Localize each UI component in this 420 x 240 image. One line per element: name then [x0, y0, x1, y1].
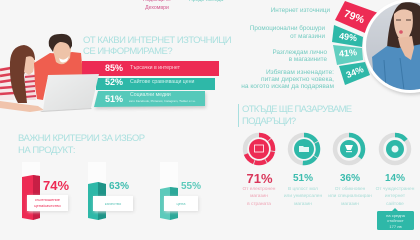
bar value 3: 51% — [105, 94, 123, 104]
heading: sources — [83, 35, 231, 57]
top fragment text — [143, 0, 171, 10]
wedge value 3: 41% — [339, 47, 357, 58]
heading: criteria — [18, 133, 145, 156]
heading: sources: СЕ ИНФОРМИРАМЕ? — [83, 46, 172, 57]
side label 2: Промоционални брошури — [250, 25, 325, 32]
donut text 1 — [242, 187, 276, 207]
accent: heading rule — [238, 104, 239, 127]
bar values: 85% — [105, 63, 123, 73]
donut text 4 — [376, 187, 414, 207]
donut 2 — [290, 135, 318, 163]
donut text 2 — [284, 187, 322, 207]
donut text 1: в страната — [247, 202, 271, 207]
side label 2: от магазини — [290, 33, 325, 40]
criteria card 1: цена/качество — [34, 203, 61, 208]
heading: criteria: НА ПРОДУКТ: — [18, 145, 75, 156]
cylinder 3 — [160, 162, 178, 220]
donut value 4: 14% — [385, 173, 405, 184]
side label 3 — [272, 48, 327, 63]
donut value 3: 36% — [340, 173, 360, 184]
criteria card 1: съотношение — [35, 197, 60, 202]
cylinder 2 — [88, 162, 106, 220]
wedge values: 79% — [342, 8, 366, 26]
donut text 3: или специализиран — [328, 194, 372, 199]
criteria card 2: качество — [105, 201, 121, 206]
donut text 1: От електронен — [243, 187, 275, 192]
wedge value 4: 34% — [345, 64, 365, 80]
bars: shopping sources — [82, 61, 219, 107]
bar value 2: 52% — [105, 77, 123, 87]
callout — [377, 211, 414, 230]
donut text 4: От чуждестранен — [376, 187, 414, 192]
laptop — [43, 74, 99, 111]
side label 4: питам директно човека, — [261, 76, 334, 83]
bar label 3: Социални медии — [130, 92, 171, 98]
criteria value 2: 63% — [109, 180, 129, 192]
criteria value 3: 55% — [181, 180, 201, 192]
criteria card 3 — [164, 196, 198, 211]
illustration: couple with laptop — [0, 34, 83, 112]
donut text 4: сайтове — [386, 202, 404, 207]
bar sublabel 3: като Facebook, Pinterest, Instagram, Twitter и т.н. — [129, 99, 196, 103]
top fragment text: Дехомври — [145, 4, 169, 10]
heading: where: ОТКЪДЕ ЩЕ ПАЗАРУВАМЕ — [242, 104, 351, 115]
donut value 2: 51% — [293, 173, 313, 184]
callout pointer — [392, 208, 398, 211]
bar label 2: Сайтове сравняващи цени — [130, 79, 194, 85]
donut text 2: магазин — [294, 202, 312, 207]
donut 1 — [245, 135, 273, 163]
criteria card 3: цена — [177, 201, 185, 206]
side label 3: Разглеждам лично — [272, 48, 327, 56]
callout: 177 лв — [389, 224, 402, 229]
criteria card 2 — [93, 196, 133, 211]
side label 4: Избягвам изненадите: — [266, 68, 334, 76]
wedge chart — [332, 1, 381, 85]
donut text 4: интернет — [385, 194, 405, 199]
portrait — [360, 0, 420, 95]
side label 4 — [241, 68, 334, 90]
donut 4 — [381, 135, 409, 163]
wedge value 2: 49% — [338, 30, 358, 43]
criteria value 1: 74% — [43, 178, 69, 193]
donut text 2: В цялост мол — [288, 187, 318, 192]
side label 2 — [250, 25, 325, 40]
bar label 1: Търсачки в интернет — [130, 65, 180, 71]
side label 4: на когото искам да подарявам — [241, 83, 334, 90]
donut value 1: 71% — [246, 171, 273, 186]
donut text 3 — [328, 186, 372, 207]
donut text 2: или универсален — [284, 194, 322, 199]
heading: sources: ОТ КАКВИ ИНТЕРНЕТ ИЗТОЧНИЦИ — [83, 35, 231, 46]
donut text 1: магазин — [250, 194, 268, 199]
criteria card 1 — [27, 195, 68, 211]
heading: where — [242, 104, 352, 126]
heading: criteria: ВАЖНИ КРИТЕРИИ ЗА ИЗБОР — [18, 133, 145, 144]
callout: стойност — [387, 218, 404, 223]
cylinder 1 — [22, 162, 40, 220]
side labels: Интернет източници — [271, 7, 330, 14]
donut text 3: магазин — [341, 202, 359, 207]
callout: на средна — [386, 212, 405, 218]
donut 3 — [335, 135, 363, 163]
donut text 3: От обикновен — [335, 187, 365, 192]
side label 3: в магазините — [289, 56, 327, 63]
heading: where: ПОДАРЪЦИ? — [242, 116, 295, 126]
